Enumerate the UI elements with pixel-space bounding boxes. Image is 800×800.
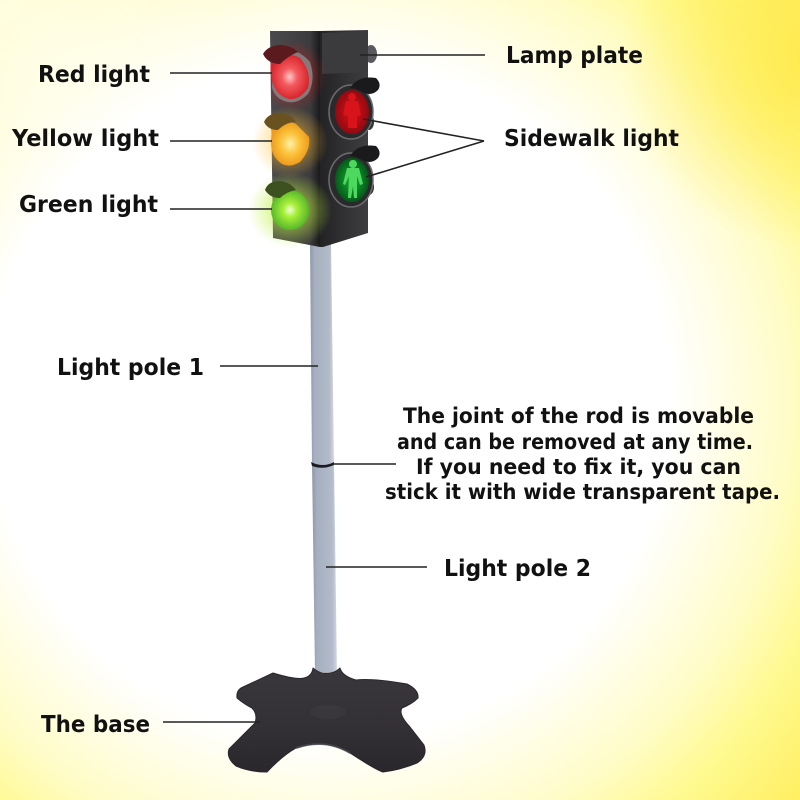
leader lines [163,55,485,722]
lamp plate [322,31,368,74]
label: light pole 1: Light pole 1 [57,355,204,381]
joint note: stick it with wide transparent tape. [385,480,780,504]
sidewalk knobs [364,114,374,130]
joint note [385,404,780,504]
green figure [343,160,363,198]
rod joint [311,462,334,468]
red figure [343,93,361,128]
label: red light: Red light [38,62,150,88]
sidewalk red light [329,77,380,139]
label: sidewalk light: Sidewalk light [504,126,679,152]
left face [270,31,320,247]
right face [320,30,368,247]
joint note: The joint of the rod is movable [403,404,754,428]
red light [263,42,324,110]
traffic light head [248,30,380,248]
base highlight [310,705,346,719]
yellow light [252,106,328,178]
label: lamp plate: Lamp plate [506,43,643,69]
lamp plate knob [365,45,377,63]
sidewalk green light [329,145,380,207]
joint note: If you need to fix it, you can [416,455,741,479]
label: yellow light: Yellow light [11,126,159,152]
green light [248,172,332,248]
label: light pole 2: Light pole 2 [444,556,591,582]
light pole 2 [312,464,337,672]
joint note: and can be removed at any time. [397,430,753,454]
label: green light: Green light [19,192,158,218]
light pole 1 [310,244,334,464]
label: the base: The base [41,712,150,738]
the base [228,668,425,772]
